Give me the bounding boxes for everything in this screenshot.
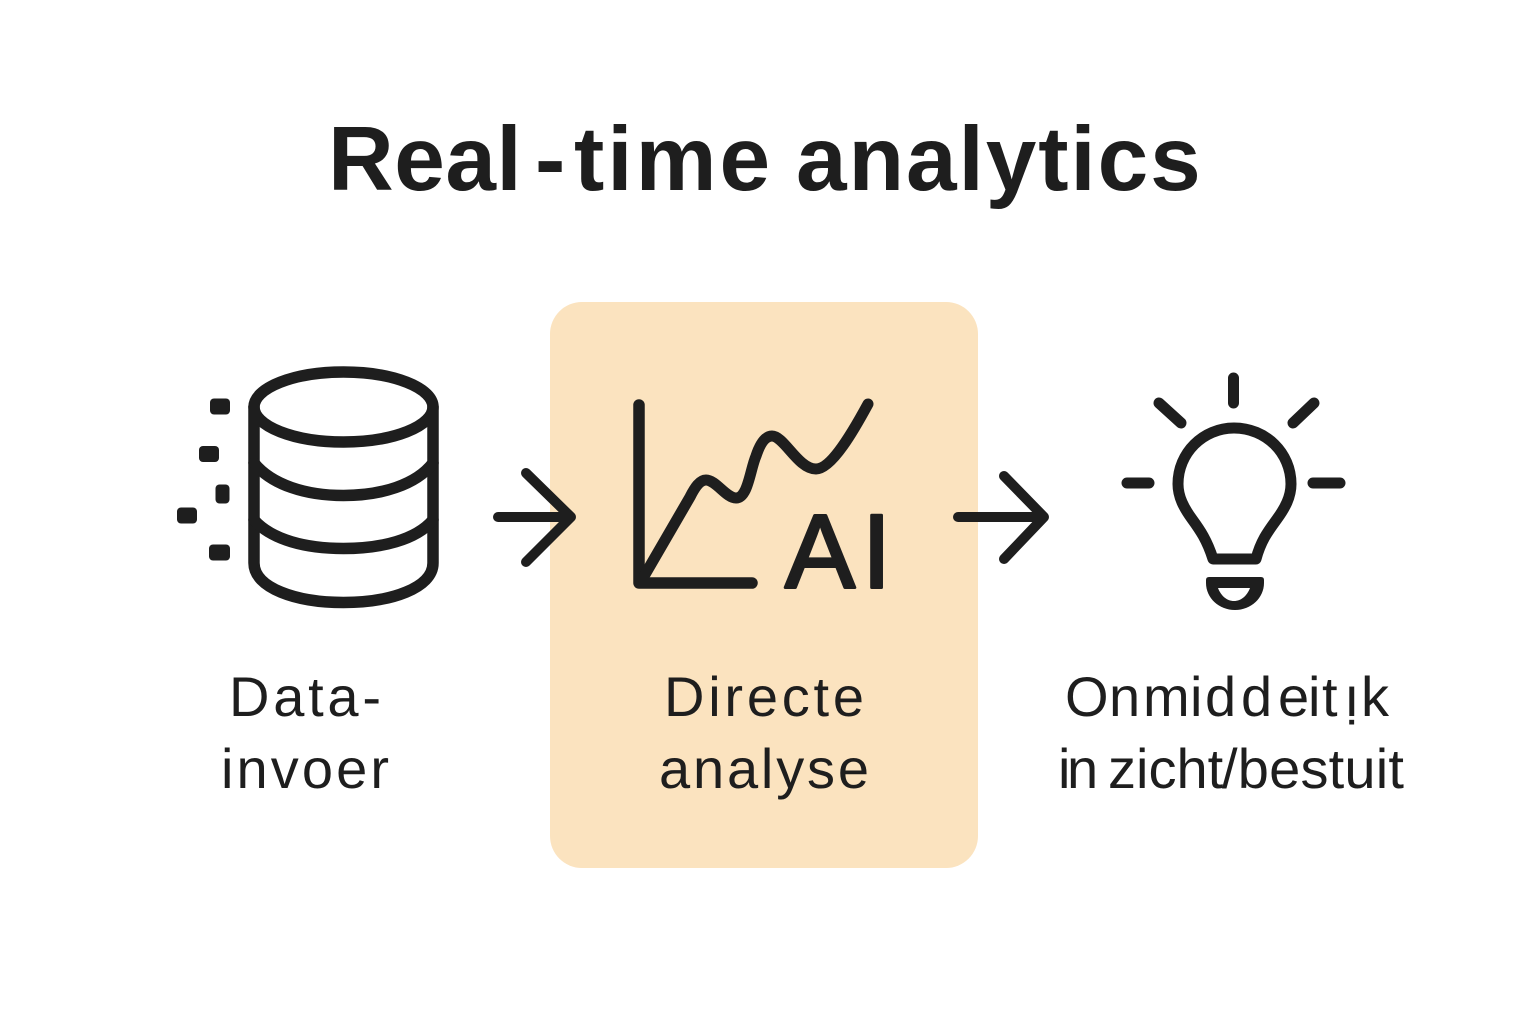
arrow: input to analysis	[498, 473, 571, 562]
title: time	[574, 109, 801, 210]
title: analytics	[796, 109, 1203, 210]
icon: line chart with AI	[639, 404, 891, 610]
label: immediate insight: Onmiddeit	[1065, 665, 1338, 728]
label: immediate insight	[1058, 665, 1404, 800]
label: data input: Data-	[229, 665, 381, 728]
label: immediate insight: ı̣	[1344, 665, 1360, 728]
label: direct analysis	[659, 665, 869, 800]
title: Real	[328, 109, 522, 210]
icon: line chart with AI: A	[785, 494, 855, 610]
icon: database with data points	[177, 372, 433, 602]
panel: highlighted analysis step	[550, 302, 978, 868]
label: immediate insight: in	[1058, 737, 1098, 800]
arrow: analysis to insight	[958, 476, 1044, 559]
label: immediate insight: k	[1361, 665, 1390, 728]
icon: line chart with AI: I	[862, 494, 891, 610]
label: direct analysis: analyse	[659, 737, 869, 800]
title: -	[535, 109, 566, 210]
label: direct analysis: Directe	[664, 665, 864, 728]
label: data input	[221, 665, 389, 800]
label: immediate insight: zicht	[1108, 737, 1224, 800]
label: immediate insight: /bestuit	[1222, 737, 1404, 800]
icon: light bulb	[1127, 378, 1340, 610]
label: data input: invoer	[221, 737, 389, 800]
